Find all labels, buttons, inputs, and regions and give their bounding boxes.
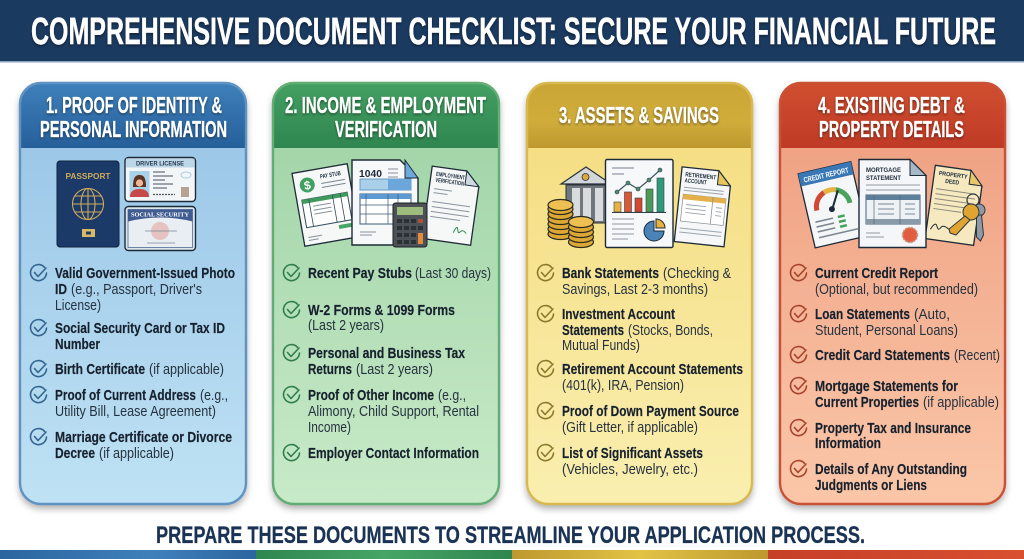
item: significant assets (538, 445, 703, 478)
icon: keys (949, 194, 985, 241)
item: photo ID: License) (55, 298, 101, 314)
heading: panel 2: 2. INCOME & EMPLOYMENT (285, 92, 486, 118)
item: investment statements: (Stocks, Bonds, (628, 323, 713, 339)
icon: pay stub: $ (303, 178, 312, 193)
item: down payment (538, 403, 739, 436)
item: employer contact (284, 445, 479, 462)
item: other income (284, 387, 479, 436)
item: investment statements: Statements (562, 323, 624, 339)
heading: panel 4 (818, 92, 965, 142)
icon: credit report (798, 162, 868, 248)
icon: credit report: CREDIT REPORT (803, 165, 850, 185)
icon: social security card: SOCIAL SECURITY (131, 212, 190, 218)
icon: pay stub (292, 164, 360, 246)
icon: passport: PASSPORT (66, 172, 111, 181)
icon: driver license (125, 158, 196, 202)
item: loan statements (791, 306, 958, 339)
item: credit report: Current Credit Report (815, 266, 938, 282)
item: current address (31, 387, 228, 420)
icon: employment verification: EMPLOYMENT (436, 172, 465, 182)
item: photo ID (31, 265, 235, 314)
item: other income: (e.g., (438, 388, 466, 404)
item: credit report: (Optional, but recommended) (815, 282, 978, 298)
heading: panel 1 (40, 92, 227, 142)
icon: mortgage statement: MORTGAGE (866, 168, 901, 174)
heading: panel 1: 1. PROOF OF IDENTITY & (46, 92, 222, 118)
item: W-2 forms (284, 302, 455, 334)
icon: form 1040 (352, 160, 418, 245)
item: social security (31, 320, 225, 353)
item: mortgage statements: Current Properties (815, 395, 919, 411)
icon: pay stub: PAY STUB (320, 171, 342, 181)
item: credit card statements: (Recent) (954, 348, 1000, 364)
icon: bank (561, 167, 611, 223)
item: mortgage statements (791, 378, 999, 411)
item: birth certificate: (if applicable) (149, 362, 224, 378)
item: property tax (791, 420, 971, 452)
checklist: panel 4 (791, 265, 1000, 494)
checklist: panel 1 (31, 265, 235, 462)
item: bank statements: (Checking & (663, 266, 731, 282)
item: marriage certificate: Marriage Certificate or Divorce (55, 430, 232, 446)
item: tax returns: (Last 2 years) (356, 362, 433, 378)
item: investment statements: Mutual Funds) (562, 338, 640, 354)
item: employer contact: Employer Contact Information (308, 446, 479, 462)
icon: calculator (393, 203, 427, 247)
icon: property deed (925, 165, 984, 245)
item: bank statements: Savings, Last 2-3 months) (562, 282, 708, 298)
item: judgments or liens: Judgments or Liens (815, 478, 927, 494)
panel: 2. income and employment (272, 82, 500, 505)
item: significant assets: (Vehicles, Jewelry, etc.) (562, 462, 698, 478)
panel: 1. proof of identity (19, 82, 247, 505)
item: tax returns (284, 345, 466, 378)
item: bank statements (538, 265, 731, 298)
icon: social security card (125, 206, 196, 250)
icon: employment verification: VERIFICATION (435, 178, 464, 188)
icon: form 1040: 1040 (359, 168, 382, 180)
footer colour band (0, 550, 1024, 559)
item: mortgage statements: Mortgage Statements for (815, 379, 958, 395)
item: mortgage statements: (if applicable) (923, 395, 999, 411)
icon: property deed: PROPERTY (938, 171, 968, 181)
item: loan statements: Student, Personal Loans) (815, 323, 958, 339)
item: retirement statements (538, 361, 743, 394)
item: other income: Income) (308, 420, 351, 436)
item: photo ID: (e.g., Passport, Driver's (71, 282, 202, 298)
item: significant assets: List of Significant Assets (562, 446, 703, 462)
icon: mortgage statement: STATEMENT (866, 176, 901, 182)
item: judgments or liens (791, 461, 967, 494)
item: current address: Proof of Current Address (55, 388, 196, 404)
icon: investment chart (606, 160, 673, 248)
title banner (0, 0, 1024, 62)
icon: employment verification (422, 166, 481, 245)
item: loan statements: (Auto, (914, 307, 950, 323)
item: current address: Utility Bill, Lease Agreement) (55, 404, 216, 420)
item: credit report (791, 265, 978, 298)
icon: coin stacks (548, 200, 594, 248)
panel: 3. assets and savings (526, 82, 753, 505)
item: down payment: (Gift Letter, if applicable) (562, 420, 698, 436)
item: pay stubs: Recent Pay Stubs (308, 266, 412, 282)
item: investment statements (538, 306, 713, 354)
item: marriage certificate (31, 429, 232, 462)
checklist: panel 2 (284, 265, 491, 462)
item: social security: Number (55, 337, 100, 353)
item: current address: (e.g., (200, 388, 228, 404)
item: property tax: Information (815, 436, 881, 452)
checklist: panel 3 (538, 265, 743, 478)
heading: panel 3: 3. ASSETS & SAVINGS (559, 102, 719, 128)
panel: 4. existing debt and property (779, 82, 1006, 505)
item: tax returns: Personal and Business Tax (308, 346, 466, 362)
item: photo ID: Valid Government-Issued Photo (55, 266, 235, 282)
icon: passport (57, 161, 119, 247)
item: tax returns: Returns (308, 362, 352, 378)
icon: property deed: DEED (945, 179, 960, 187)
heading: panel 2 (285, 92, 486, 142)
item: retirement statements: (401(k), IRA, Pension) (562, 378, 684, 394)
item: retirement statements: Retirement Account Statements (562, 362, 743, 378)
item: other income: Proof of Other Income (308, 388, 434, 404)
item: marriage certificate: Decree (55, 446, 95, 462)
heading: panel 1: PERSONAL INFORMATION (40, 116, 227, 142)
item: birth certificate: Birth Certificate (55, 362, 145, 378)
icon: driver license: DRIVER LICENSE (136, 160, 184, 168)
item: W-2 forms: W-2 Forms & 1099 Forms (308, 303, 455, 319)
item: investment statements: Investment Account (562, 307, 675, 323)
item: W-2 forms: (Last 2 years) (308, 318, 384, 334)
item: photo ID: ID (55, 282, 67, 298)
item: birth certificate (31, 361, 224, 378)
item: social security: Social Security Card or Tax ID (55, 321, 225, 337)
item: property tax: Property Tax and Insurance (815, 421, 971, 437)
icon: retirement account (674, 167, 732, 247)
icon: retirement account: RETIREMENT (685, 172, 717, 182)
item: marriage certificate: (if applicable) (99, 446, 174, 462)
item: credit card statements: Credit Card Statements (815, 348, 950, 364)
item: down payment: Proof of Down Payment Source (562, 404, 739, 420)
icon: retirement account: ACCOUNT (684, 178, 707, 187)
item: pay stubs: (Last 30 days) (415, 266, 491, 282)
icon: mortgage statement (859, 160, 926, 248)
item: loan statements: Loan Statements (815, 307, 910, 323)
item: bank statements: Bank Statements (562, 266, 659, 282)
heading: panel 2: VERIFICATION (335, 116, 437, 142)
item: pay stubs (284, 265, 491, 282)
item: judgments or liens: Details of Any Outstanding (815, 462, 967, 478)
item: other income: Alimony, Child Support, Rental (308, 404, 479, 420)
